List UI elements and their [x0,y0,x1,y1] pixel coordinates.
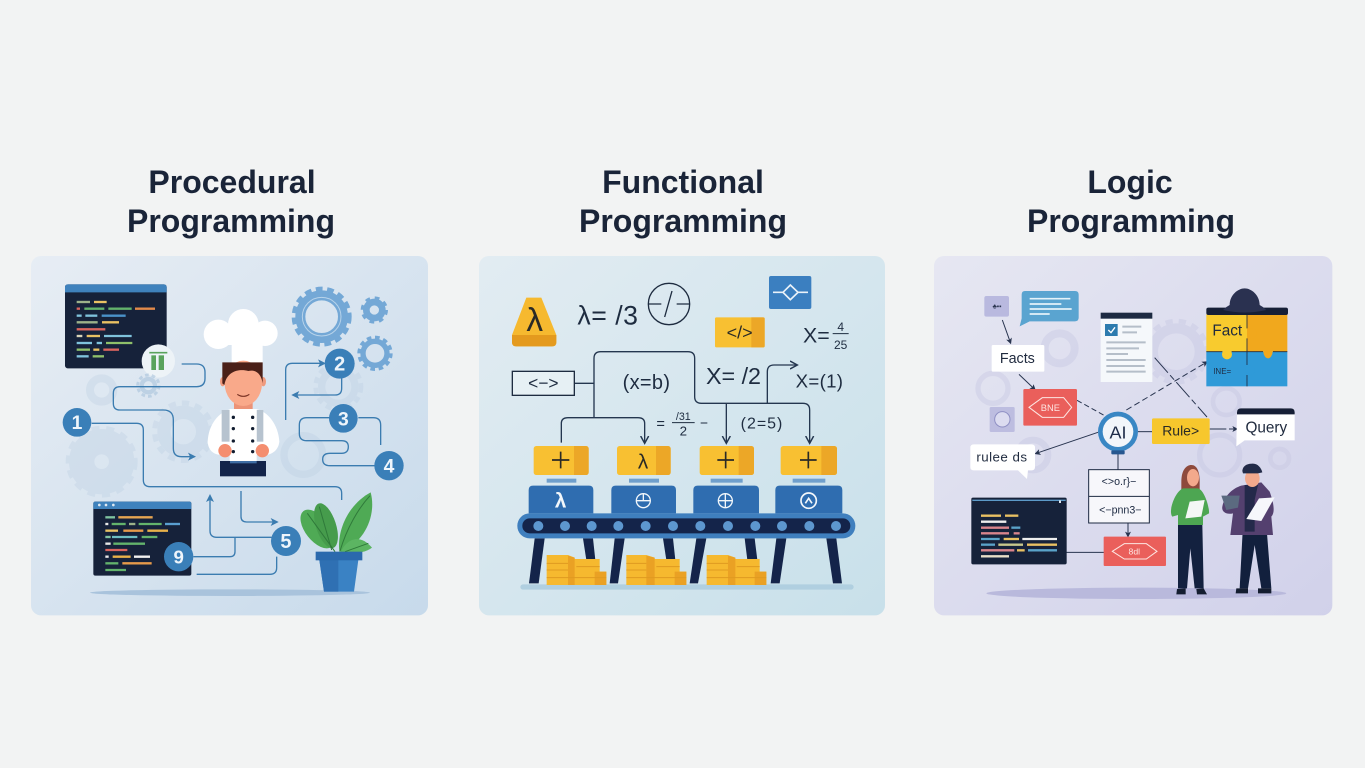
connector lines [92,363,381,574]
step badge 5: 5 [280,531,292,553]
code window bottom [93,502,191,576]
shadow [90,589,370,596]
icon: large gear [294,289,349,344]
title: Procedural Programming: Procedural [148,164,316,200]
blue block 3 [693,486,759,513]
icon: red diamond box lower: 8dl [1129,547,1140,557]
formula: X=(1) [796,371,843,392]
puzzle: Fact [1212,322,1243,339]
title: Procedural Programming: Programming [127,203,335,239]
yellow block 3 [700,446,754,475]
step badge 3 [329,404,358,433]
step badge 4: 4 [384,457,395,478]
icon: green badge [142,344,175,378]
gold stack 3 [707,555,766,585]
label: rules [970,444,1035,479]
document [1101,313,1152,382]
gold stack 2 [626,555,686,585]
yellow block 4 [781,446,837,475]
panel: functional programming [479,256,885,615]
icon: medium gear [359,337,391,369]
blue block 4 [775,486,842,513]
hat [1223,288,1266,312]
step badge 9: 9 [173,546,184,567]
person: man [1221,464,1275,593]
formula: X= [803,324,830,348]
formula: X= /2 [706,363,761,389]
formula: (2=5) [741,415,782,432]
step badge 1: 1 [72,413,83,434]
formula [803,320,849,352]
speech bubble [1020,291,1079,326]
yellow block 1 [534,446,589,475]
icon: code block: </> [727,322,753,342]
small gear [138,375,159,396]
title: Functional Programming: Programming [579,203,787,239]
icon: red diamond box: BNE [1041,403,1060,413]
floor shadow [520,584,854,590]
step badge 4 [374,451,404,480]
title: Logic Programming: Programming [1027,203,1235,239]
icon: code block [715,317,765,347]
formula: λ= /3 [577,301,638,331]
step badge 5 [271,526,301,556]
icon: red diamond box lower [1104,537,1166,566]
icon: circle slash [648,283,690,325]
title: Logic Programming: Logic [1087,164,1173,200]
label: Query [1236,408,1295,446]
icon: small gear [362,298,386,322]
blue block lambda: λ [555,489,567,512]
formula: (x=b) [623,372,670,394]
puzzle [1206,288,1288,386]
step badge 2 [325,349,355,379]
blue block lambda [529,486,593,513]
label: rules: rulee ds [976,450,1027,465]
formula: = [656,416,665,432]
icon: small tag [984,296,1009,317]
code rule box: <>o.r}− [1102,476,1136,488]
icon: red diamond box [1023,389,1077,426]
code window [971,498,1067,564]
yellow block 2: λ [638,450,649,473]
icon: blue connector block [769,276,811,309]
icon: lambda block [512,298,556,346]
icon: small tag: ♣▪▪ [992,304,1002,311]
puzzle: lNE= [1214,367,1232,376]
arrow box: <−> [528,373,559,393]
code window top [65,284,167,368]
connector lines [561,352,810,443]
formula: /31 [676,411,691,423]
formula: 4 [837,320,844,334]
step badge 3: 3 [338,409,349,430]
code rule box: <−pnn3− [1099,505,1142,517]
code rule box [1089,470,1149,523]
icon: circle tile [990,407,1015,432]
ground shadow [986,588,1286,599]
label: Rule: Rule> [1162,423,1199,439]
icon: lambda block: λ [526,302,543,339]
icon: potted plant [294,492,372,592]
AI hub: AI [1109,422,1126,442]
chef figure [204,309,279,476]
step badge 1 [63,408,91,437]
label: Rule [1152,418,1210,444]
block stands [547,479,825,483]
label: Facts: Facts [1000,351,1035,367]
yellow block 2 [617,446,671,475]
arrow box [512,371,574,395]
formula: 25 [834,338,848,352]
panel: procedural programming [31,256,428,615]
blue block 2 [611,486,676,513]
label: Query: Query [1245,419,1288,436]
person: woman [1171,465,1209,594]
formula [656,411,707,439]
panel: logic programming [934,256,1332,615]
title: Functional Programming: Functional [602,164,764,200]
conveyor legs [529,538,842,583]
connector lines [1002,320,1236,552]
label: Facts [992,345,1044,372]
AI hub [1098,412,1138,454]
formula: 2 [680,424,687,439]
conveyor belt [517,513,855,538]
step badge 9 [164,542,193,571]
step badge 2: 2 [334,354,345,376]
gold stack 1 [547,555,606,585]
